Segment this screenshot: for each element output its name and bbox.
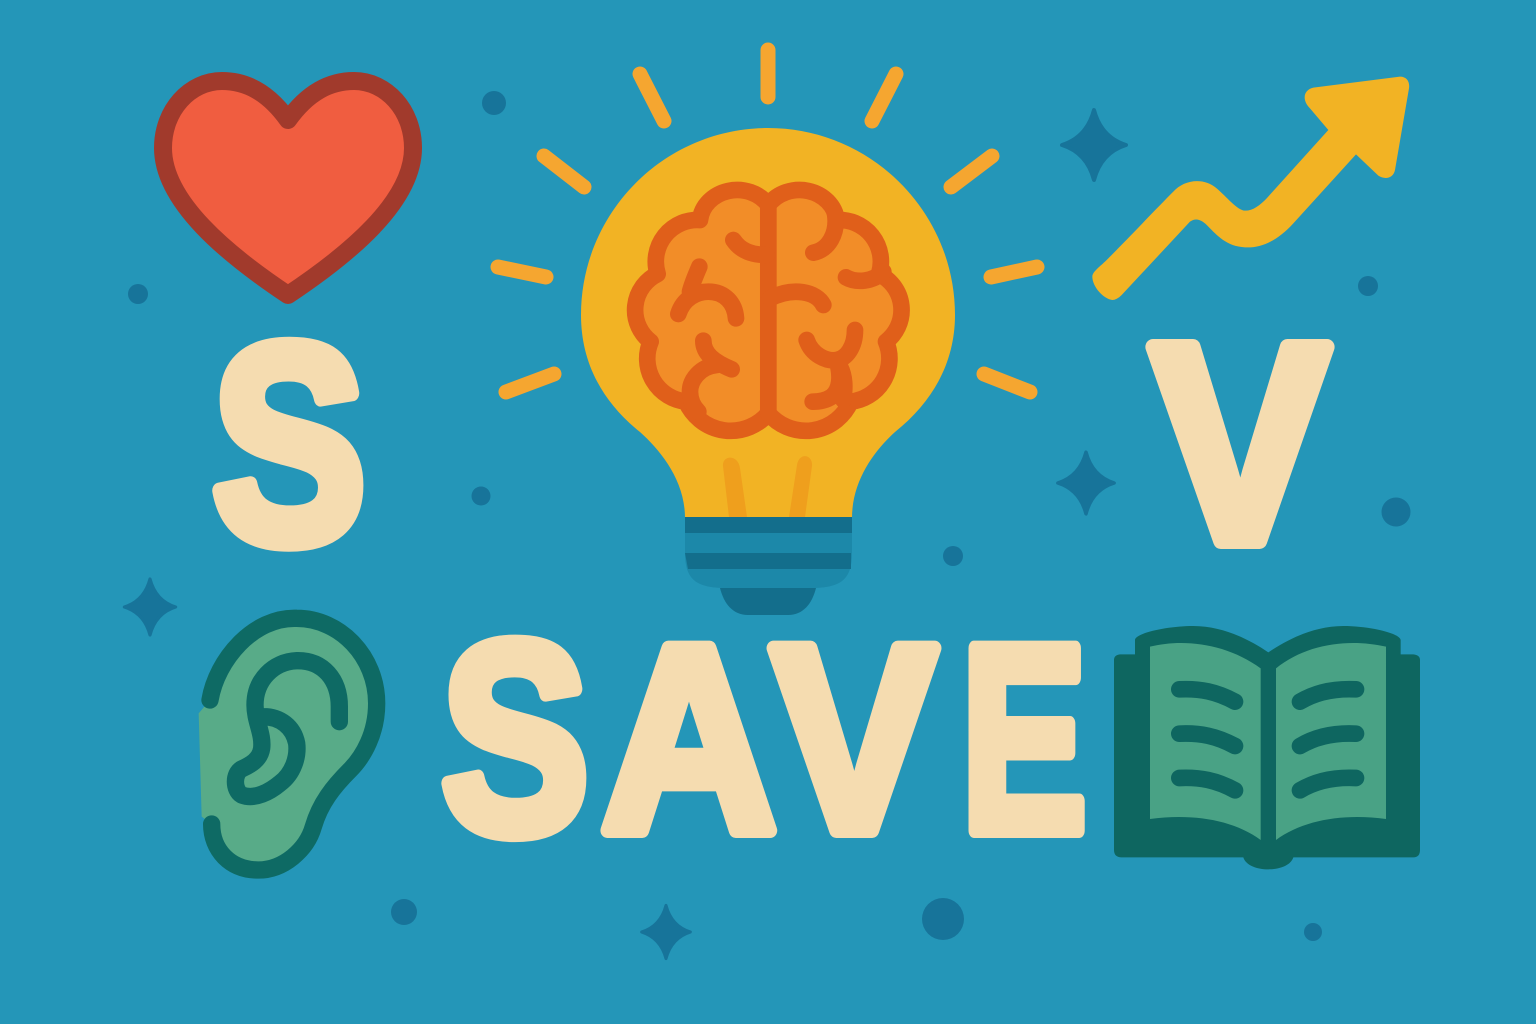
word SAVE: A xyxy=(601,591,777,887)
word SAVE: V xyxy=(772,591,936,887)
text lines xyxy=(1179,689,1356,790)
bulb base xyxy=(685,517,852,615)
icon: rising arrow xyxy=(1092,77,1409,300)
icon: open book xyxy=(1114,626,1420,869)
brain xyxy=(635,190,902,431)
word SAVE: E xyxy=(961,591,1087,887)
filaments xyxy=(723,456,812,517)
icon: light bulb with brain xyxy=(498,50,1037,615)
word SAVE xyxy=(441,585,1087,890)
inner ear xyxy=(235,661,339,797)
ear outline xyxy=(210,618,377,870)
icon: ear xyxy=(199,618,377,870)
bulb glass xyxy=(581,128,955,518)
ear lobe fill xyxy=(199,618,377,870)
letter V: V xyxy=(1151,287,1330,602)
letter S: S xyxy=(212,287,366,601)
icon: heart xyxy=(163,81,413,295)
light rays xyxy=(498,50,1037,392)
book pages xyxy=(1150,643,1386,840)
left hemisphere xyxy=(635,190,768,431)
brain folds xyxy=(678,213,883,412)
book cover xyxy=(1114,626,1420,869)
word SAVE: S xyxy=(441,585,589,890)
right hemisphere xyxy=(768,190,902,431)
decorative dots and sparkles xyxy=(124,91,1410,959)
